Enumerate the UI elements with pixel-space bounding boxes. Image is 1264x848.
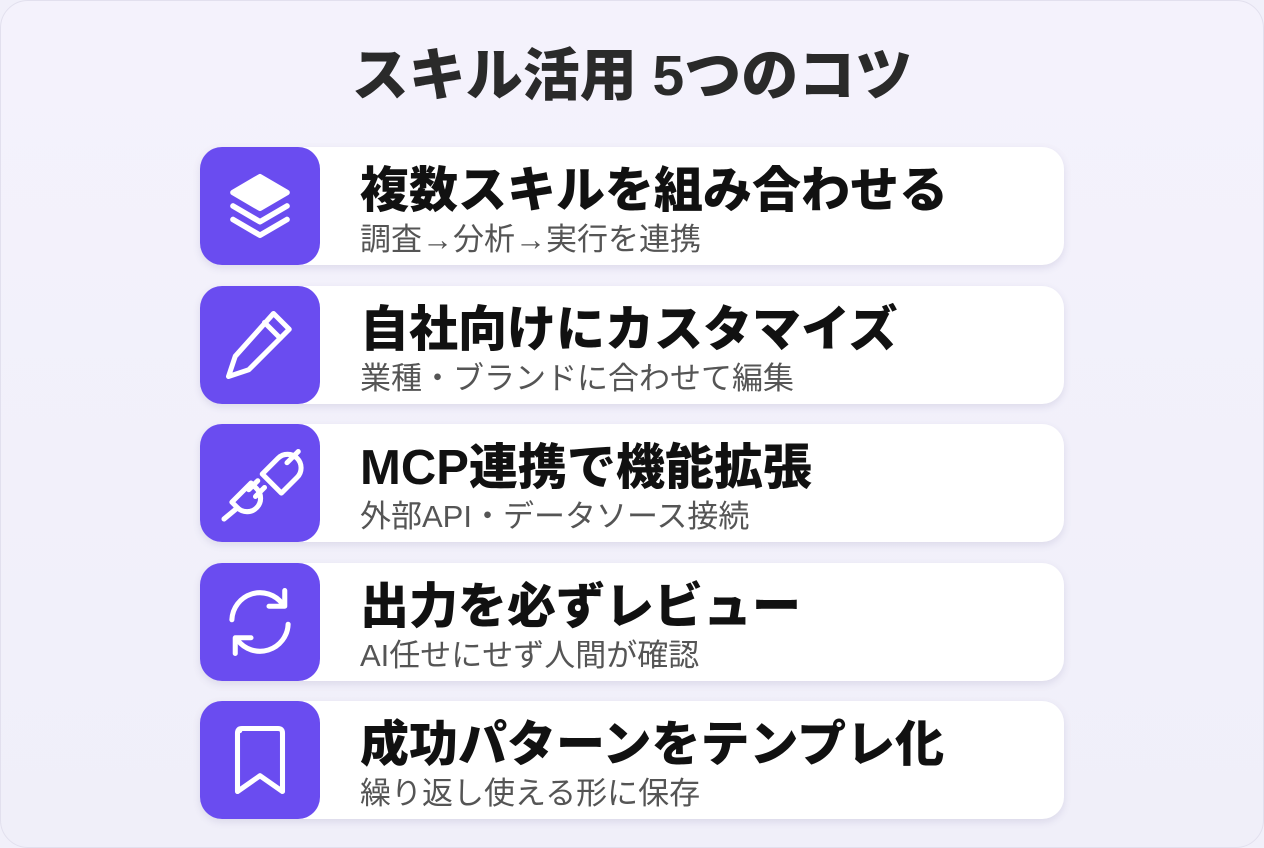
- icon: plug: [200, 424, 320, 542]
- icon: layers: [200, 147, 320, 265]
- heading: 成功パターンをテンプレ化: [360, 718, 944, 772]
- card 3: [200, 424, 1064, 542]
- card 4: [200, 563, 1064, 681]
- heading: 複数スキルを組み合わせる: [360, 164, 948, 218]
- card 2: [200, 286, 1064, 404]
- icon: pencil: [200, 286, 320, 404]
- card 1: [200, 147, 1064, 265]
- icon: refresh: [200, 563, 320, 681]
- heading: 自社向けにカスタマイズ: [360, 303, 898, 357]
- subtext: 繰り返し使える形に保存: [360, 776, 700, 811]
- title: スキル活用 5つのコツ: [352, 44, 912, 108]
- icon: bookmark: [200, 701, 320, 819]
- subtext: 業種・ブランドに合わせて編集: [360, 361, 794, 396]
- card 5: [200, 701, 1064, 819]
- subtext: 調査→分析→実行を連携: [360, 222, 701, 257]
- subtext: 外部API・データソース接続: [360, 499, 749, 534]
- heading: 出力を必ずレビュー: [360, 580, 801, 634]
- subtext: AI任せにせず人間が確認: [360, 638, 699, 673]
- heading: MCP連携で機能拡張: [360, 441, 812, 495]
